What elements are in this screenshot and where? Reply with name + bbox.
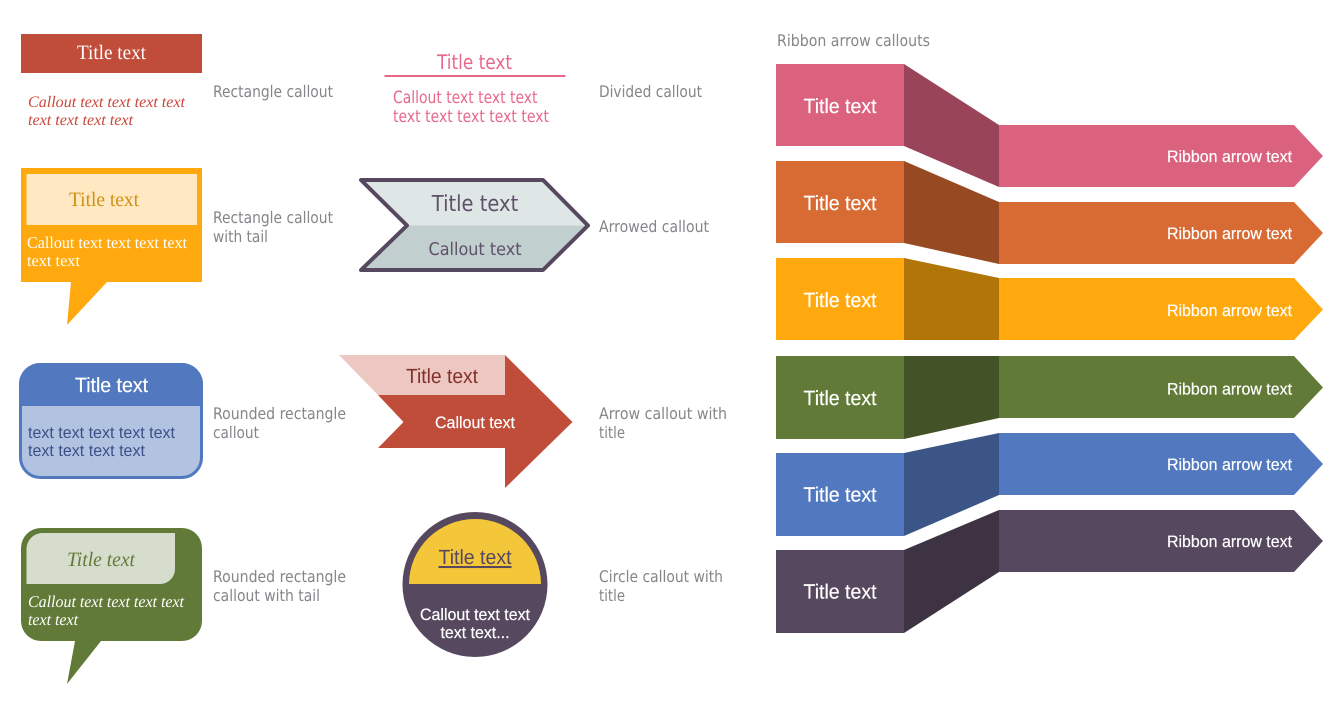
tailed body: [21, 168, 202, 325]
fold: [904, 356, 999, 439]
title text: Title text: [804, 484, 877, 506]
arrow: [999, 510, 1323, 572]
panel: rectangle callout with tail: [21, 168, 202, 325]
label: rounded rectangle callout with tail: callout with tail: [213, 586, 320, 605]
callout text: text text text text: [28, 442, 145, 460]
ribbon text: Ribbon arrow text: [1167, 148, 1292, 166]
label: rounded rectangle callout: Rounded rectangle: [213, 404, 346, 423]
panel: arrow callout with title: [339, 355, 572, 488]
callout text: [28, 94, 186, 129]
label: circle callout with title: [599, 567, 723, 605]
arrow body: [378, 355, 572, 488]
arrow: [999, 356, 1323, 418]
ribbon 3: amber: [776, 258, 1323, 340]
title text: Title text: [436, 50, 512, 74]
bottom half: [361, 226, 588, 270]
title bar: [21, 34, 202, 73]
title text: Title text: [804, 192, 877, 215]
callout text: [27, 233, 187, 270]
panel: rounded rectangle callout with tail: [21, 528, 202, 684]
fold: [904, 64, 999, 187]
callout text: text text text text text: [28, 424, 175, 442]
ribbon text: Ribbon arrow text: [1167, 533, 1292, 551]
callout text: text text...: [440, 624, 510, 642]
ribbon text: Ribbon arrow text: [1167, 380, 1292, 398]
title text: Title text: [75, 374, 148, 397]
title text: Title text: [804, 289, 877, 312]
callout text: [28, 592, 184, 629]
title text: Title text: [804, 95, 877, 118]
arrow: [999, 433, 1323, 495]
label: circle callout with title: title: [599, 586, 625, 605]
header: [19, 363, 203, 406]
title band: [339, 355, 505, 395]
ribbon 4: green: [776, 356, 1323, 439]
callout text: Callout text text text text: [28, 94, 186, 111]
callout text: [393, 88, 549, 127]
title text: Title text: [67, 549, 136, 571]
tailed body: [21, 528, 202, 684]
callout text: Callout text: [435, 414, 515, 432]
ribbon text: Ribbon arrow text: [1167, 456, 1292, 474]
ribbon 5: blue: [776, 433, 1323, 536]
circle: [402, 512, 548, 657]
title block: [776, 258, 904, 340]
label: rounded rectangle callout: [213, 404, 346, 442]
label: rounded rectangle callout with tail: [213, 567, 346, 605]
top half: [361, 180, 588, 226]
outline: [361, 180, 588, 270]
arrow: [999, 278, 1323, 340]
callout text: Callout text text text text: [27, 233, 187, 252]
fold: [904, 510, 999, 633]
callout text: [28, 424, 175, 460]
callout text: Callout text text: [420, 606, 530, 624]
title text: Title text: [438, 546, 512, 569]
label: rounded rectangle callout: callout: [213, 423, 259, 442]
callout text: text text text text: [28, 112, 134, 129]
arrow: [999, 202, 1323, 264]
fold: [904, 258, 999, 340]
label: rectangle callout with tail: [213, 208, 333, 246]
label: arrowed callout: Arrowed callout: [599, 217, 709, 236]
panel: circle callout with title: [402, 512, 548, 657]
label: divided callout: Divided callout: [599, 82, 702, 101]
panel: divided callout: [384, 50, 566, 127]
title block: [776, 161, 904, 243]
ribbon text: Ribbon arrow text: [1167, 302, 1292, 320]
ribbon 2: orange: [776, 161, 1323, 264]
callout text: [420, 606, 530, 642]
ribbon 1: pink: [776, 64, 1323, 187]
title text: Title text: [804, 580, 877, 604]
callout text: Callout text: [428, 240, 522, 260]
panel: rounded rectangle callout: [19, 363, 203, 478]
callout text: Callout text text text text: [28, 592, 184, 611]
title box: [26, 533, 175, 584]
callout text: text text: [28, 610, 78, 629]
title block: [776, 453, 904, 536]
title text: Title text: [69, 189, 139, 211]
label: circle callout with title: Circle callout with: [599, 567, 723, 586]
label: rectangle callout with tail: Rectangle callout: [213, 208, 333, 227]
ribbon text: Ribbon arrow text: [1167, 225, 1292, 243]
label: arrow callout with title: Arrow callout with: [599, 404, 727, 423]
label: arrow callout with title: title: [599, 423, 625, 442]
title text: Title text: [77, 42, 146, 64]
body: [20, 364, 202, 478]
label: rectangle callout with tail: with tail: [213, 227, 268, 246]
callout text: Callout text text text: [393, 88, 538, 108]
fold: [904, 161, 999, 264]
divider line: [384, 75, 566, 77]
panel: rectangle callout: [21, 34, 202, 129]
fold: [904, 433, 999, 536]
label: rectangle callout: Rectangle callout: [213, 82, 333, 101]
arrow: [999, 125, 1323, 187]
ribbon 6: purple: [776, 510, 1323, 633]
title box: [26, 174, 197, 225]
title text: Title text: [431, 192, 519, 217]
title block: [776, 64, 904, 146]
yellow half: [409, 519, 541, 584]
panel: arrowed callout: [361, 180, 588, 270]
title text: Title text: [804, 387, 877, 410]
title block: [776, 550, 904, 633]
title text: Title text: [406, 365, 478, 388]
callout text: text text text text text: [393, 107, 549, 127]
label: rounded rectangle callout with tail: Rounded rectangle: [213, 567, 346, 586]
title block: [776, 356, 904, 439]
callout text: text text: [27, 251, 80, 270]
label: arrow callout with title: [599, 404, 727, 442]
heading: ribbon arrow callouts: Ribbon arrow callouts: [777, 31, 930, 50]
